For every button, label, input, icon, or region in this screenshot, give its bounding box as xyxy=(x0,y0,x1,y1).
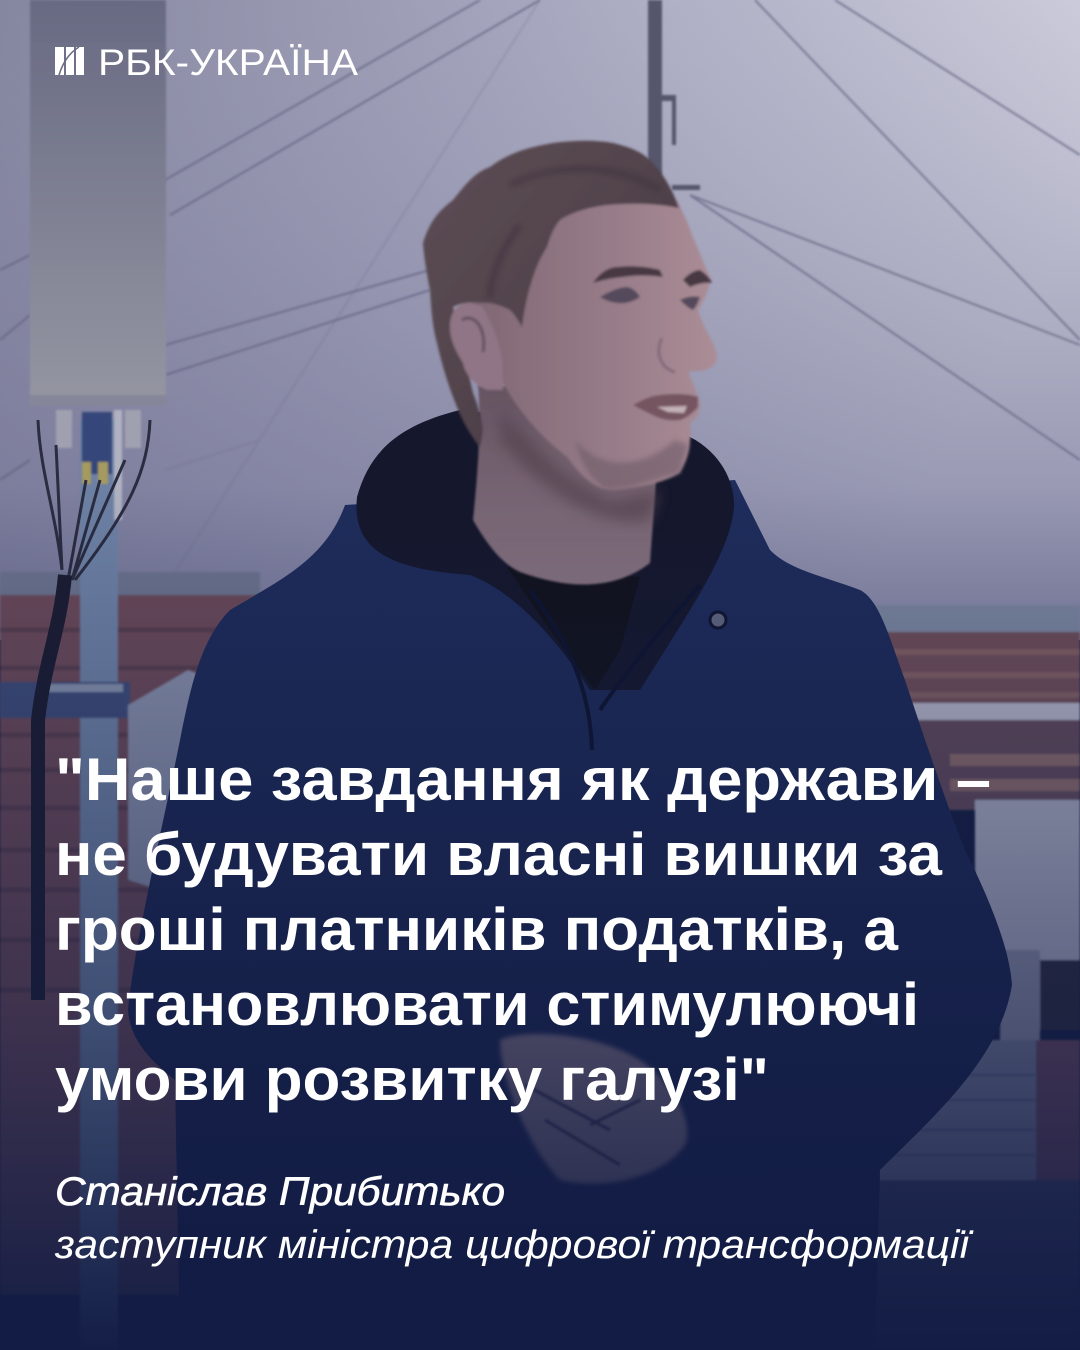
stubble xyxy=(575,440,688,490)
quote: не будувати власні вишки за xyxy=(55,821,943,888)
speaker role: заступник міністра цифрової трансформації xyxy=(54,1223,974,1267)
jaw shadow on neck xyxy=(500,410,660,522)
coat xyxy=(128,480,1012,1350)
face xyxy=(470,190,717,490)
quote xyxy=(55,746,991,1113)
coat button xyxy=(710,612,726,628)
nose wing shadow xyxy=(659,338,675,372)
antenna cables xyxy=(38,420,150,1000)
brick wall left xyxy=(0,572,260,1295)
hood lining xyxy=(356,410,734,690)
quote: умови розвитку галузі" xyxy=(55,1046,769,1113)
logo: РБК-Україна xyxy=(55,42,358,83)
black t-shirt xyxy=(507,567,640,690)
head xyxy=(423,141,717,490)
eyebrows xyxy=(593,266,712,287)
antenna panel xyxy=(30,0,166,520)
zip and seam xyxy=(530,585,700,750)
attribution xyxy=(54,1170,974,1267)
speaker name: Станіслав Прибитько xyxy=(55,1170,505,1214)
hair xyxy=(423,141,679,447)
building right xyxy=(860,605,1080,1350)
logo mark xyxy=(55,47,84,75)
hands xyxy=(500,1034,687,1184)
guy wires in the sky xyxy=(0,0,1080,580)
logo wordmark: РБК-УКРАЇНА xyxy=(98,42,358,83)
mouth xyxy=(633,394,698,420)
rooftop mast behind head xyxy=(648,0,700,190)
hair shading xyxy=(490,169,660,298)
eyes xyxy=(600,287,700,310)
pole and clamps xyxy=(0,420,215,1350)
ear xyxy=(450,303,503,390)
quote: встановлювати стимулюючі xyxy=(55,971,919,1038)
quote: "Наше завдання як держави – xyxy=(55,746,991,813)
person xyxy=(128,141,1012,1350)
neck xyxy=(473,385,656,585)
quote: гроші платників податків, а xyxy=(55,896,899,963)
photo background: sky xyxy=(0,0,1080,640)
